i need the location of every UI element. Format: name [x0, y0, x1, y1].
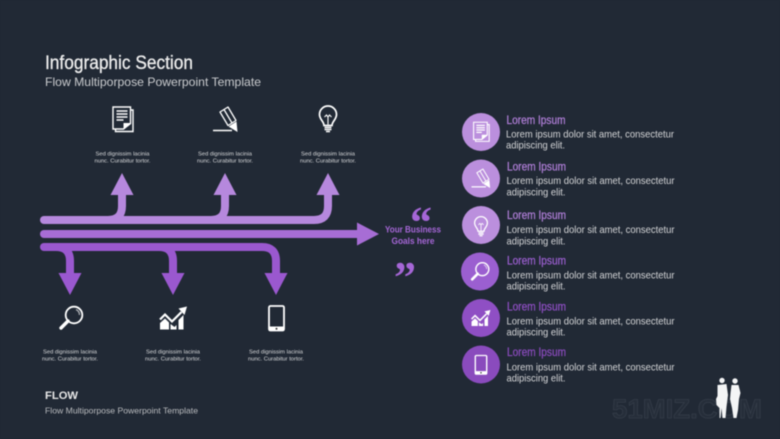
list item 1: Lorem Ipsum	[506, 115, 566, 127]
caption 6	[248, 350, 304, 362]
caption 2: Sed dignissim lacinia	[198, 152, 253, 158]
list item 5: Lorem ipsum dolor sit amet, consectetur	[506, 316, 675, 328]
list item 6: adipiscing elit.	[506, 372, 566, 384]
list item 3: Lorem Ipsum	[507, 210, 566, 222]
captions: top row	[94, 152, 356, 164]
list item 2: Lorem Ipsum	[507, 162, 566, 174]
list item 4: Lorem ipsum dolor sit amet, consectetur	[506, 270, 675, 282]
icon: tablet	[268, 306, 284, 331]
subtitle: Flow Multiporpose Powerpoint Template	[45, 75, 261, 89]
list item 6	[462, 346, 675, 384]
caption 2: nunc. Curabitur tortor.	[197, 158, 253, 164]
caption 2	[197, 152, 253, 164]
arrow group: bottom branches	[40, 243, 288, 295]
list item 4: Lorem Ipsum	[507, 256, 566, 268]
caption 3: Sed dignissim lacinia	[301, 152, 356, 158]
list item 3: adipiscing elit.	[506, 236, 566, 248]
watermark: 51MIZ.COM	[612, 394, 762, 424]
callout text: Your Business	[385, 224, 441, 236]
callout text: Goals here	[392, 236, 434, 247]
icon: light bulb	[320, 106, 336, 132]
list item 5: Lorem Ipsum	[507, 302, 566, 314]
flow arrows	[40, 173, 379, 295]
list item 2	[462, 160, 675, 198]
list item 2: adipiscing elit.	[506, 186, 566, 198]
callout text	[385, 224, 441, 247]
list item 4	[461, 252, 675, 292]
list item 5	[462, 299, 675, 338]
list item 1: Lorem ipsum dolor sit amet, consectetur	[506, 128, 674, 140]
caption 4: Sed dignissim lacinia	[43, 350, 98, 356]
footer heading: FLOW	[45, 390, 79, 402]
caption 6: Sed dignissim lacinia	[249, 350, 304, 356]
title: Infographic Section	[45, 52, 193, 74]
caption 5: Sed dignissim lacinia	[146, 350, 201, 356]
caption 4	[42, 350, 98, 362]
caption 1	[94, 152, 151, 164]
icon: document	[113, 107, 133, 132]
icon: growth chart	[160, 306, 187, 330]
caption 1: Sed dignissim lacinia	[96, 152, 150, 158]
list item 6: Lorem ipsum dolor sit amet, consectetur	[506, 362, 675, 374]
icon: pencil	[213, 107, 238, 132]
arrow: centre line to goals	[40, 222, 379, 246]
icon: magnifier	[61, 307, 82, 328]
opening quote: “	[410, 198, 432, 247]
captions: bottom row	[42, 350, 304, 362]
callout: business goals	[385, 198, 441, 302]
caption 3: nunc. Curabitur tortor.	[300, 158, 356, 164]
arrow group: top branches	[40, 173, 340, 224]
caption 3	[300, 152, 356, 164]
list item 1: adipiscing elit.	[506, 140, 565, 152]
caption 1: nunc. Curabitur tortor.	[94, 158, 151, 164]
list item 2: Lorem ipsum dolor sit amet, consectetur	[506, 175, 675, 187]
list item 6: Lorem Ipsum	[507, 347, 566, 359]
list item 5: adipiscing elit.	[506, 326, 566, 338]
list item 1	[462, 113, 674, 152]
closing quote: ”	[394, 253, 416, 302]
footer subtitle: Flow Multiporpose Powerpoint Template	[45, 406, 198, 416]
caption 4: nunc. Curabitur tortor.	[42, 356, 98, 362]
list item 3: Lorem ipsum dolor sit amet, consectetur	[506, 224, 675, 236]
list item 3	[462, 206, 675, 248]
caption 6: nunc. Curabitur tortor.	[248, 356, 304, 362]
list item 4: adipiscing elit.	[506, 280, 566, 292]
caption 5	[145, 350, 201, 362]
silhouettes: business people	[716, 378, 740, 418]
caption 5: nunc. Curabitur tortor.	[145, 356, 201, 362]
